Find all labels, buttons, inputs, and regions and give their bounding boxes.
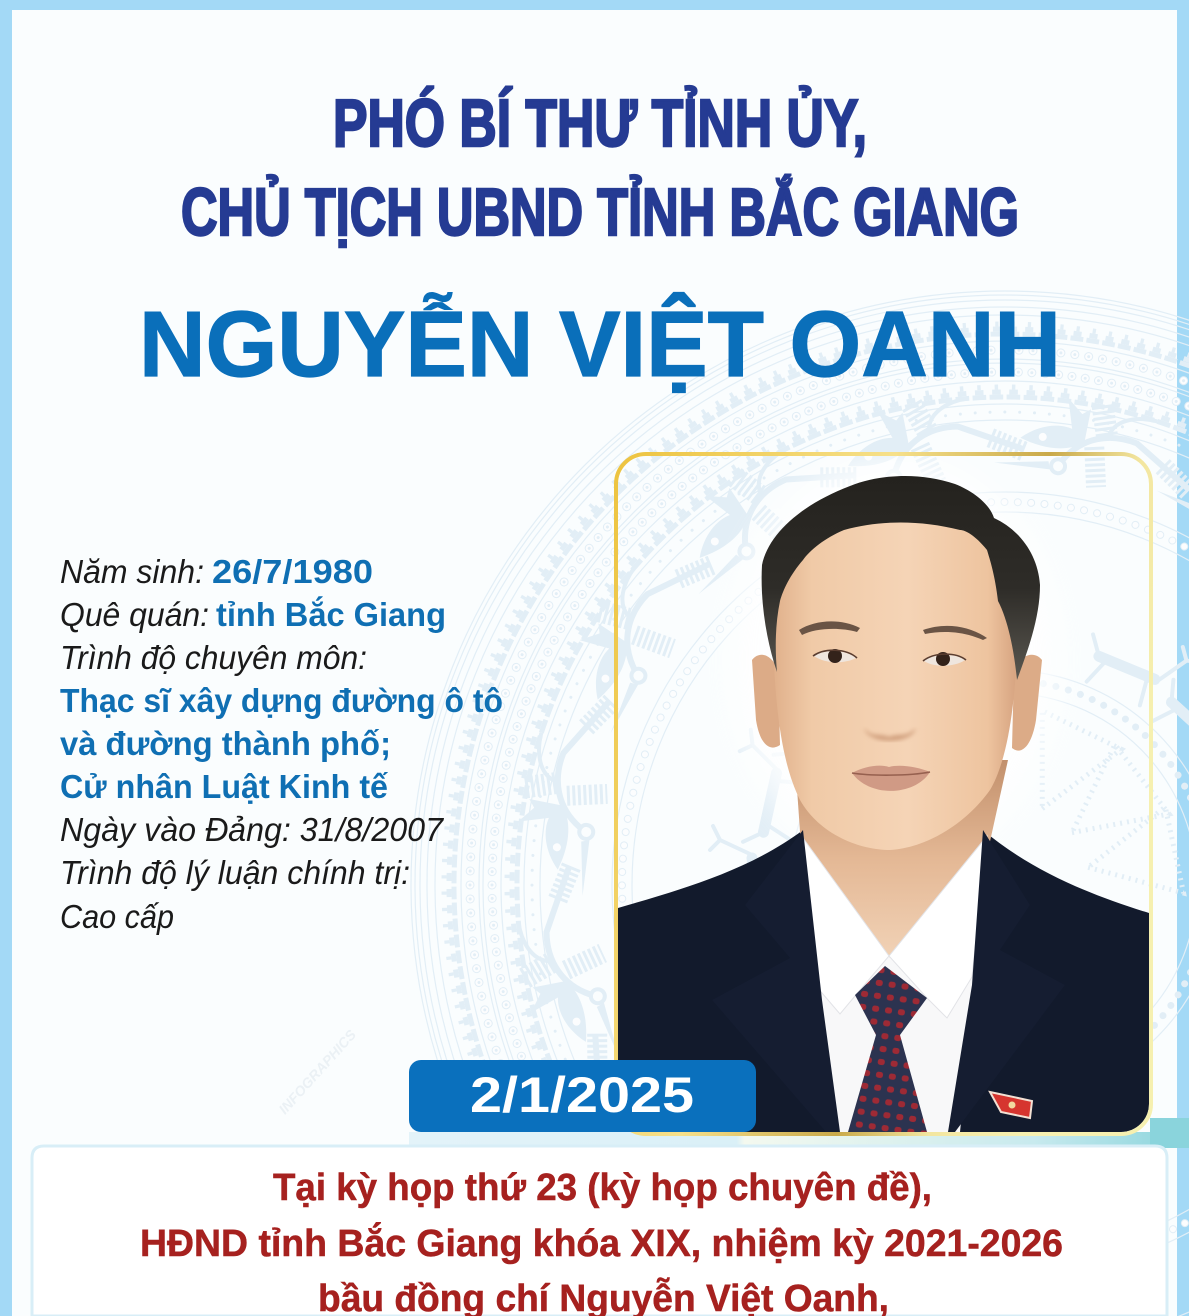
biography text block: Trình độ chuyên môn: xyxy=(60,639,367,676)
lapel pin flag xyxy=(990,1092,1032,1118)
title: position xyxy=(181,86,1019,250)
lapels xyxy=(800,830,990,1132)
biography text block: Cử nhân Luật Kinh tế xyxy=(60,768,389,805)
portrait gold frame xyxy=(616,454,1151,1134)
biography text block: Trình độ lý luận chính trị: xyxy=(60,854,410,891)
decision text: Tại kỳ họp thứ 23 (kỳ họp chuyên đề), xyxy=(273,1167,932,1209)
decision text xyxy=(140,1167,1063,1316)
lips xyxy=(852,766,930,791)
ears xyxy=(752,655,1042,751)
neck xyxy=(795,760,1008,958)
hair xyxy=(762,476,1040,680)
date badge: 2/1/2025 xyxy=(470,1067,694,1123)
nose xyxy=(864,728,916,741)
biography text block xyxy=(60,553,503,935)
biography text block: Cao cấp xyxy=(60,898,174,935)
eyebrows xyxy=(799,621,987,640)
eyes xyxy=(813,649,966,666)
biography text block: 26/7/1980 xyxy=(212,553,373,590)
suit jacket xyxy=(618,830,1149,1132)
biography text block: Năm sinh: xyxy=(60,553,204,590)
decision text: HĐND tỉnh Bắc Giang khóa XIX, nhiệm kỳ 2021-2026 xyxy=(140,1221,1063,1265)
biography text block: tỉnh Bắc Giang xyxy=(216,596,446,633)
portrait photo xyxy=(618,455,1149,1132)
mouth line xyxy=(852,772,930,775)
face xyxy=(773,510,1017,850)
soft halo behind head xyxy=(730,455,1060,865)
date badge xyxy=(409,1060,756,1132)
title: name: NGUYỄN VIỆT OANH xyxy=(139,292,1061,396)
biography text block: và đường thành phố; xyxy=(60,725,391,762)
title: position: PHÓ BÍ THƯ TỈNH ỦY, xyxy=(333,86,867,161)
bronze drum background pattern xyxy=(411,291,1189,1316)
biography text block: Thạc sĩ xây dựng đường ô tô xyxy=(60,682,503,719)
teal band behind portrait xyxy=(409,1118,1189,1148)
shirt xyxy=(822,968,974,1132)
biography text block: Ngày vào Đảng: 31/8/2007 xyxy=(60,811,445,848)
biography text block: Quê quán: xyxy=(60,596,209,633)
necktie xyxy=(848,966,927,1132)
faint watermark: INFOGRAPHICS xyxy=(275,1026,359,1117)
panel: decision card xyxy=(32,1146,1167,1316)
shirt collars xyxy=(803,836,987,1018)
